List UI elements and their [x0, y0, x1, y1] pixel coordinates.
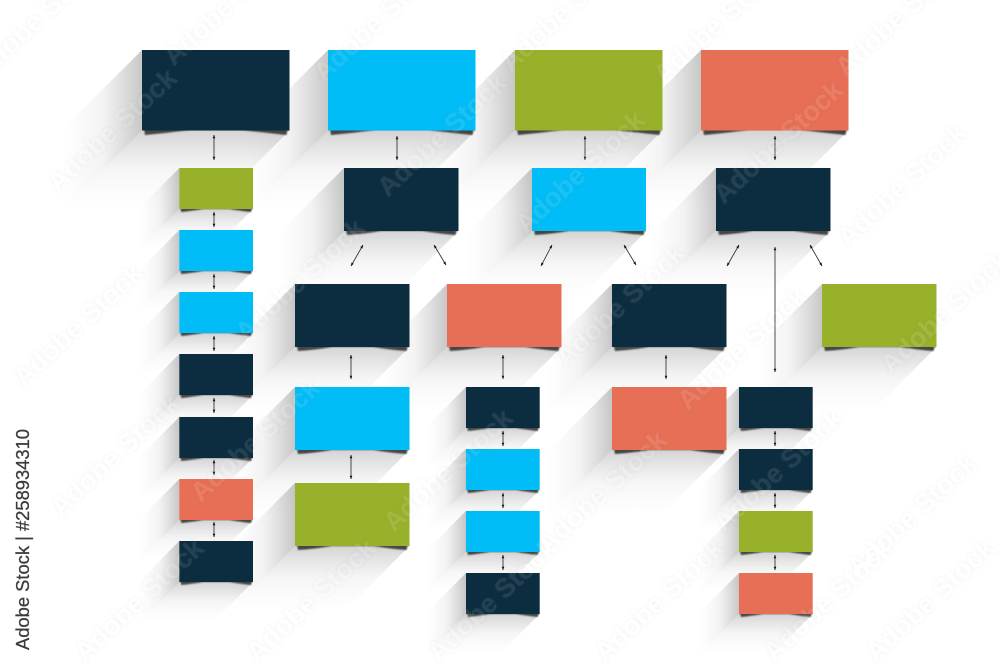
watermark layer: Adobe Stock [240, 532, 382, 666]
watermark layer: Adobe Stock [671, 280, 813, 415]
watermark layer: Adobe Stock [509, 104, 651, 239]
watermark layer: Adobe Stock [377, 402, 519, 537]
right column box: orange [699, 573, 813, 654]
column one box: navy third [139, 541, 253, 622]
column one box: orange [139, 479, 253, 560]
stock id text: Adobe Stock | #258934310 [13, 429, 33, 650]
box: second row navy right [651, 168, 830, 296]
right column box: navy [699, 387, 813, 468]
watermark layer: Adobe Stock [7, 257, 149, 392]
watermark layer: Adobe Stock [41, 62, 183, 197]
box: top green [435, 50, 662, 210]
third row box: orange [382, 284, 562, 412]
watermark layer: Adobe Stock [859, 532, 1000, 666]
third row box: navy left [230, 284, 410, 412]
arrows [214, 135, 822, 570]
watermark layer: Adobe Stock [707, 402, 849, 537]
box: second row navy left [279, 168, 458, 296]
fourth row box: orange [547, 387, 726, 515]
middle column box: cyan [426, 449, 540, 530]
watermark layer: Adobe Stock [549, 237, 691, 372]
box: top cyan [248, 50, 476, 210]
column one box: green [139, 168, 253, 249]
column one box: navy second [139, 417, 253, 498]
right column box: green [699, 511, 813, 592]
third row box: navy right [547, 284, 726, 412]
watermark layer: Adobe Stock [44, 387, 186, 522]
column one box: navy [139, 354, 253, 435]
middle column box: cyan second [426, 511, 540, 592]
fourth row box: cyan [230, 387, 410, 515]
watermark layer: Adobe Stock [68, 532, 210, 666]
watermark layer: Adobe Stock [229, 212, 371, 347]
watermark layer: Adobe Stock [707, 74, 849, 209]
watermark layer: Adobe Stock [757, 532, 899, 666]
watermark layer: Adobe Stock [421, 532, 563, 666]
watermark layer: Adobe Stock [371, 67, 513, 202]
watermark layer: Adobe Stock [588, 532, 730, 666]
watermark layer: Adobe Stock [184, 372, 326, 507]
middle column box: navy [426, 387, 540, 468]
watermark layer: Adobe Stock [831, 117, 973, 252]
box: top navy [62, 50, 290, 210]
box: second row cyan [467, 168, 646, 296]
third row box: green [757, 284, 936, 412]
column one box: cyan [139, 230, 253, 311]
right column box: navy second [699, 449, 813, 530]
watermark layer: Adobe Stock [531, 424, 673, 559]
middle column box: navy second [426, 573, 540, 654]
box: top orange [621, 50, 848, 210]
column one box: cyan second [139, 292, 253, 373]
fifth row box: green [230, 483, 410, 611]
watermark layer: Adobe Stock [841, 447, 983, 582]
